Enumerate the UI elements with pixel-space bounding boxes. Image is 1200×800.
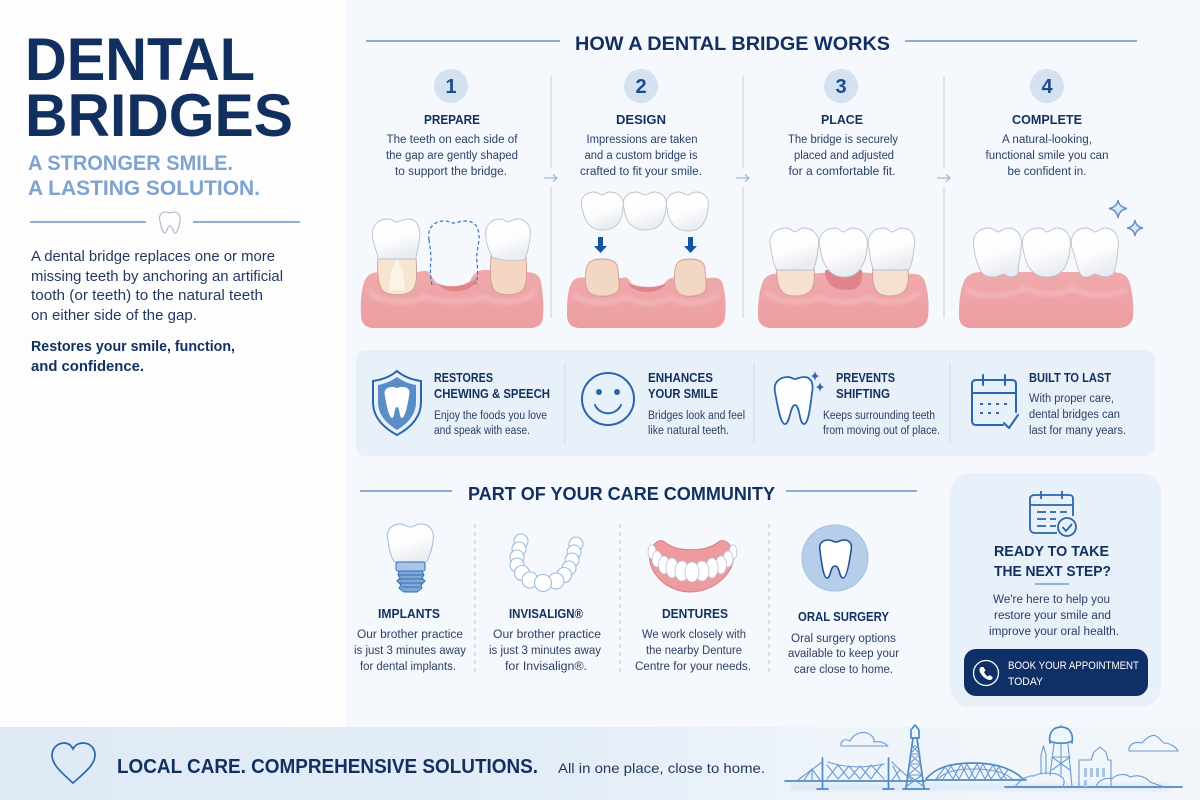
oral surgery text: available to keep your [788,648,899,660]
illustration: bridge above prepared teeth [567,192,726,328]
panel: benefits [356,350,1155,456]
icon: calendar with check [1030,491,1076,536]
title: BRIDGES [25,82,293,149]
benefit: built to last: BUILT TO LAST [1029,371,1111,385]
button: book your appointment: TODAY [1008,676,1044,688]
button: book your appointment [964,649,1148,696]
cta heading: READY TO TAKE [994,543,1109,560]
benefit: restores chewing and speech [373,371,550,437]
subtitle: A STRONGER SMILE. [28,151,233,175]
dentures text: DENTURES [662,607,728,621]
intro paragraph: tooth (or teeth) to the natural teeth [31,287,263,304]
dentures text [635,607,751,673]
truss bridge [785,758,925,789]
cta text: restore your smile and [994,610,1111,622]
icon: aligner [510,534,583,592]
clouds [841,732,888,746]
invisalign text: Our brother practice [493,629,601,641]
invisalign text: for Invisalign®. [505,661,587,673]
panel: call to action [950,473,1161,707]
dashed missing tooth outline [429,221,479,285]
water tower [1050,725,1072,787]
building [1079,747,1111,787]
icon: shield tooth [373,371,421,435]
subtitle: A LASTING SOLUTION. [28,176,260,200]
number badge 1: 1 [445,76,457,98]
step 4 text: A natural-looking, [1002,134,1092,146]
number badge 3 [824,69,858,103]
intro paragraph: missing teeth by anchoring an artificial [31,268,283,285]
icon: tooth in circle [802,525,868,591]
step 3 text [788,113,898,178]
subtitle [28,151,260,200]
divider with tooth icon [30,212,300,233]
bold statement [31,338,235,375]
bushes [1015,773,1064,787]
benefit: prevents shifting: Keeps surrounding teeth [823,410,935,422]
bridge crowns [581,192,708,231]
icon: smile [582,373,634,425]
intro paragraph: on either side of the gap. [31,307,197,324]
icon: dentures [648,541,737,592]
invisalign text [489,607,601,673]
step 4 text [986,113,1108,178]
service: implants [354,524,466,673]
icon: implant [387,524,433,592]
step 3 text: The bridge is securely [788,134,898,146]
oral surgery text: care close to home. [794,664,893,676]
number badge 2: 2 [635,76,647,98]
heading: how a dental bridge works: HOW A DENTAL BRIDGE WORKS [575,34,890,55]
icon: calendar check [972,375,1018,428]
footer band [0,725,1200,800]
number badge 1 [434,69,468,103]
invisalign text: is just 3 minutes away [489,645,601,657]
step 2 text [580,113,702,178]
step 1 text: The teeth on each side of [386,134,518,146]
button: book your appointment: BOOK YOUR APPOINTMENT [1008,660,1139,672]
illustration: bridge placed [758,228,929,328]
implants text: IMPLANTS [378,607,440,621]
oral surgery text: ORAL SURGERY [798,610,890,624]
implants text: Our brother practice [357,629,463,641]
intro paragraph [31,248,283,324]
step 1 text: PREPARE [424,113,480,127]
number badge 4: 4 [1041,76,1053,98]
oral surgery text: Oral surgery options [791,633,896,645]
step 1: prepare [361,69,543,328]
service: dentures [635,541,751,673]
step 1 text: to support the bridge. [395,166,507,178]
dentures text: Centre for your needs. [635,661,751,673]
implants text: is just 3 minutes away [354,645,466,657]
invisalign text: INVISALIGN® [509,607,584,621]
number badge 4 [1030,69,1064,103]
implants text: for dental implants. [360,661,456,673]
benefit: prevents shifting: PREVENTS [836,371,895,385]
implants text [354,607,466,673]
skyline illustration [785,725,1182,790]
benefit: enhances your smile [582,371,745,437]
cta heading: THE NEXT STEP? [994,563,1111,580]
icon: heart [52,743,95,783]
step 1 text: the gap are gently shaped [386,150,518,162]
intro paragraph: A dental bridge replaces one or more [31,248,275,265]
benefit: prevents shifting: SHIFTING [836,387,890,401]
step 3 text: PLACE [821,113,863,127]
benefit: enhances your smile: Bridges look and feel [648,410,745,422]
step 4 text: functional smile you can [986,150,1108,162]
step 4 text: be confident in. [1008,166,1086,178]
down arrows [594,237,697,253]
step dividers and arrows [544,76,950,318]
benefit: enhances your smile: like natural teeth. [648,425,729,437]
step 2 text: DESIGN [616,113,666,127]
title: DENTAL [25,26,255,93]
bold statement: Restores your smile, function, [31,338,235,355]
left column [25,26,300,375]
step 3: place [758,69,929,328]
icon: tooth with sparkles [775,371,824,424]
benefit: restores chewing and speech: and speak with ease. [434,425,530,437]
footer tagline: LOCAL CARE. COMPREHENSIVE SOLUTIONS. [117,756,538,778]
illustration: prepared gap [361,219,543,328]
sparkles [1109,200,1143,236]
benefit: prevents shifting [775,371,940,437]
step 2 text: and a custom bridge is [584,150,698,162]
water glow [790,784,1170,790]
cta text: We're here to help you [993,594,1110,606]
step 3 text: placed and adjusted [794,150,894,162]
cta text: improve your oral health. [989,626,1119,638]
dentures text: the nearby Denture [646,645,742,657]
dentures text: We work closely with [642,629,746,641]
service: invisalign [489,534,601,673]
cta heading [994,543,1111,580]
ground line [1005,786,1182,788]
cta text [989,594,1119,638]
step 1 text [386,113,518,178]
benefit: restores chewing and speech: Enjoy the foods you love [434,410,547,422]
number badge 2 [624,69,658,103]
step 3 text: for a comfortable fit. [788,166,896,178]
step 2: design [567,69,726,328]
illustration: completed smile [959,200,1143,328]
benefit: restores chewing and speech: CHEWING & SPEECH [434,387,550,401]
title [25,26,293,149]
benefit: built to last: last for many years. [1029,425,1126,437]
benefit: enhances your smile: YOUR SMILE [648,387,718,401]
benefit: enhances your smile: ENHANCES [648,371,713,385]
number badge 3: 3 [835,76,847,98]
benefit: built to last: With proper care, [1029,393,1114,405]
benefit: restores chewing and speech: RESTORES [434,371,493,385]
oral surgery text [788,610,899,676]
footer note: All in one place, close to home. [558,760,765,776]
step 2 text: Impressions are taken [586,134,698,146]
right content panel [346,0,1200,727]
benefit: prevents shifting: from moving out of place. [823,425,940,437]
step 4 text: COMPLETE [1012,113,1082,127]
bold statement: and confidence. [31,358,144,375]
benefit: built to last: dental bridges can [1029,409,1120,421]
benefit: built to last [972,371,1126,437]
service: oral surgery [788,525,899,676]
lattice tower [903,725,929,789]
arch bridge [926,763,1026,780]
heading: part of your care community: PART OF YOUR CARE COMMUNITY [468,484,775,504]
step 2 text: crafted to fit your smile. [580,166,702,178]
step 4: complete [959,69,1143,328]
spire [1041,746,1046,774]
